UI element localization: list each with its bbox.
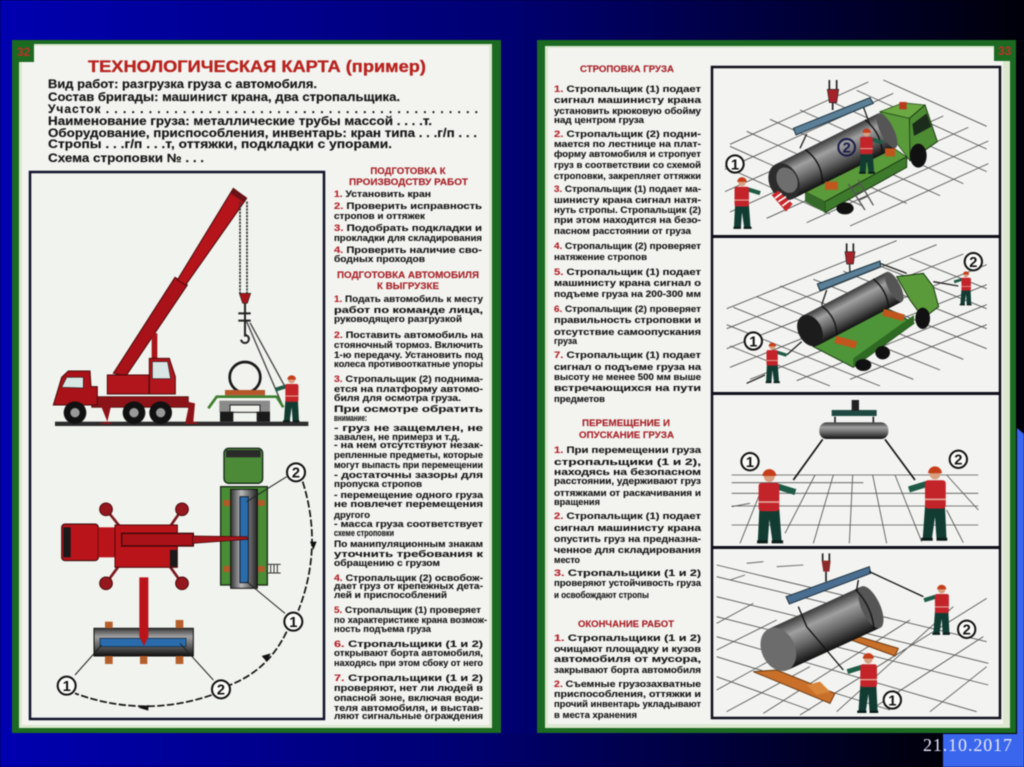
list: preparation steps: стропов и оттяжек [334,211,425,221]
list: slinging steps: сигнал о подъеме груза на [554,362,702,372]
list: truck preparation steps: ность подъема груза [334,624,432,634]
list: slinging steps: при этом находится на безо- [554,215,701,225]
list: truck preparation steps: репленные предметы, которые [334,450,483,460]
list: truck preparation steps: руководящего разгрузкой [334,314,462,324]
list: moving steps: и освобождают стропы [554,590,649,600]
list: slinging steps: 6. Стропальщик (2) проверяет [554,304,701,314]
illustration 4: lowering pipe onto supports [717,553,988,715]
list: truck preparation steps: другого [334,510,370,520]
list: preparation steps: 1. Установить кран [334,189,431,199]
list: truck preparation steps: колеса противооткатные упоры [334,359,483,369]
list: end of work steps: 2. Съемные грузозахватные [554,679,701,689]
list: truck preparation steps: 7. Стропальщики (1 и 2) [334,673,483,683]
list: truck preparation steps: пропуска стропов [334,479,422,489]
text block: work description [48,77,478,165]
list: truck preparation steps: схеме строповки [334,528,394,538]
illustration 4: lowering pipe onto supports: 1 [888,693,896,709]
list: truck preparation steps: 5. Стропальщик (1) проверяет [334,605,481,615]
list: end of work steps: закрывают борта автомобиля [554,665,701,675]
list: truck preparation steps: - перемещение одного груза [334,490,484,500]
list: truck preparation steps: уточнить требования к [334,549,483,559]
list: truck preparation steps: дает груз от крепежных дета- [334,581,483,591]
list: truck preparation steps: обращению с грузом [334,558,440,568]
list: slinging steps: груз в соответствии со схемой [554,160,701,170]
heading: truck preparation [337,270,479,292]
illustration 4: lowering pipe onto supports: 2 [963,623,971,639]
panel: crane diagrams frame [30,172,324,719]
list: end of work steps: прочий инвентарь укладывают [554,699,701,709]
list: moving steps: сигнал машинисту крана [554,523,702,533]
list: slinging steps: 3. Стропальщик (1) подает ма- [554,184,701,194]
illustration: crane and truck, plan view: 2 [217,683,225,699]
list: truck preparation steps: находясь при этом сбоку от него [334,658,483,668]
list: moving steps: 3. Стропальщики (1 и 2) [554,568,701,578]
list: truck preparation steps: 4. Стропальщик (2) освобож- [334,573,483,583]
list: slinging steps: встречающихся на пути [554,383,701,393]
list: moving steps: стропальщики (1 и 2), [554,457,701,467]
divider [712,235,1000,238]
illustration: crane and truck, plan view [58,448,317,711]
list: truck preparation steps: биля для осмотра груза. [334,393,461,403]
text block: work description: Оборудование, приспособления, инвентарь: кран типа . . .г/п . . . [48,126,477,140]
list: end of work steps: автомобиля от мусора, [554,654,701,664]
list: truck preparation steps: проверяют, нет ли людей в [334,683,483,693]
title: ТЕХНОЛОГИЧЕСКАЯ КАРТА (пример) [88,57,426,76]
list: moving steps: 1. При перемещении груза [554,445,702,455]
list: moving steps: ченное для складирования [554,545,701,555]
page number 33: 33 [998,44,1012,58]
illustration: crane and truck, plan view: 2 [292,466,300,482]
text column: slinging [554,64,702,720]
list: slinging steps: шинисту крана сигнал натя- [554,195,701,205]
text block: work description: Вид работ: разгрузка груза с автомобиля. [48,77,317,91]
text block: work description: Стропы . . .г/п . . .т, оттяжки, подкладки с упорами. [48,137,392,151]
list: end of work steps [554,633,701,720]
illustration 3: guiding lifted pipe [732,400,978,543]
list: truck preparation steps: могут выпасть при перемещении [334,460,483,470]
list: slinging steps: предметов [554,394,605,404]
text block: work description: Схема строповки № . . . [48,151,204,165]
date: 21.10.2017 [923,735,1012,755]
heading: truck preparation: ПОДГОТОВКА АВТОМОБИЛЯ [337,270,479,281]
list: moving steps: 2. Стропальщик (1) подает [554,511,702,521]
list: truck preparation steps [334,294,487,721]
list: moving steps: находясь на безопасном [554,467,701,477]
page number 32 [13,41,34,62]
illustration 1: slinging pipe on truck: 1 [731,157,739,173]
illustration: crane lifting pipe from truck, side view [53,188,308,426]
list: moving steps: опустить груз на предназна- [554,534,701,544]
page number 33 [994,41,1016,61]
list: truck preparation steps: открывают борта автомобиля, [334,648,483,658]
list: slinging steps: форму автомобиля и стропует [554,149,701,159]
list: moving steps [554,445,702,600]
list: truck preparation steps: 6. Стропальщики (1 и 2) [334,639,483,649]
list: moving steps: вращения [554,497,600,507]
list: truck preparation steps: стояночный тормоз. Включить [334,340,483,350]
list: slinging steps: нуть стропы. Стропальщик (2) [554,205,701,215]
list: preparation steps: бодных проходов [334,254,425,264]
divider [712,392,1000,395]
list: truck preparation steps: 1. Подать автомобиль к месту [334,294,484,304]
heading: truck preparation: К ВЫГРУЗКЕ [377,281,440,292]
list: moving steps: оттяжками от раскачивания и [554,488,701,498]
text block: work description: Наименование груза: металлические трубы массой . . . .т. [48,114,432,128]
list: truck preparation steps: лей и приспособлений [334,590,447,600]
illustration 2: tensioning slings: 2 [969,255,977,271]
list: truck preparation steps: ется на платформу автомо- [334,384,483,394]
text block: work description: Состав бригады: машинист крана, два стропальщика. [48,90,400,104]
list: slinging steps: натяжение стропов [554,252,647,262]
list: slinging steps: строповки, закрепляет оттяжки [554,171,701,181]
heading: preparation for work [349,166,468,188]
panel: right poster [537,40,1016,733]
list: preparation steps: 4. Проверить наличие сво- [334,245,482,255]
list: slinging steps: над центром груза [554,115,645,125]
illustration 1: slinging pipe on truck: 2 [843,141,851,157]
list: slinging steps: груза [554,336,578,346]
list: truck preparation steps: - достаточны зазоры для [334,470,483,480]
illustration: crane and truck, plan view: 1 [289,615,297,631]
list: truck preparation steps: работ по команде лица, [334,305,483,315]
list: end of work steps: 1. Стропальщики (1 и 2) [554,633,701,643]
list: slinging steps: пасном расстоянии от груза [554,226,692,236]
list: slinging steps: 5. Стропальщик (1) подает [554,267,702,277]
heading: moving and lowering [579,418,674,441]
illustration 2: tensioning slings [727,241,987,386]
illustration 3: guiding lifted pipe: 2 [954,453,962,469]
list: truck preparation steps: - груз не защемлен, не [334,423,483,433]
heading: end of work: ОКОНЧАНИЕ РАБОТ [578,619,674,630]
list: truck preparation steps: опасной зоне, включая води- [334,693,483,703]
list: preparation steps: 3. Подобрать подкладки и [334,223,482,233]
illustration: crane and truck, plan view: 1 [63,679,71,695]
list: slinging steps: установить крюковую обойму [554,106,702,116]
list: slinging steps: подъеме груза на 200-300 мм [554,289,701,299]
heading: preparation for work: ПОДГОТОВКА К [370,166,446,177]
list: truck preparation steps: При осмотре обратить [334,404,483,414]
list: truck preparation steps: ляют сигнальные ограждения [334,711,483,721]
list: slinging steps: отсутствие самоопускания [554,327,701,337]
panel: left poster [12,40,501,733]
list: slinging steps: 2. Стропальщик (2) подни- [554,129,701,139]
list: truck preparation steps: внимание: [334,413,367,423]
heading: moving and lowering: ПЕРЕМЕЩЕНИЕ И [582,418,670,429]
divider [712,546,1000,549]
list: truck preparation steps: По манипуляционным знакам [334,539,483,549]
list: end of work steps: приспособления, оттяжки и [554,689,701,699]
list: slinging steps: 4. Стропальщик (2) проверяет [554,241,701,251]
list: end of work steps: в места хранения [554,710,637,720]
list: slinging steps: мается по лестнице на плат- [554,139,701,149]
list: truck preparation steps: 1-ю передачу. Установить под [334,350,483,360]
list: preparation steps [334,189,482,264]
list: truck preparation steps: завален, не примерз и т.д. [334,432,460,442]
list: slinging steps: сигнал машинисту крана [554,95,702,105]
list: truck preparation steps: - на нем отсутствуют незак- [334,440,483,450]
heading: preparation for work: ПРОИЗВОДСТВУ РАБОТ [349,177,468,188]
list: slinging steps: 7. Стропальщик (1) подает [554,350,702,360]
list: moving steps: проверяют устойчивость груза [554,578,702,588]
list: truck preparation steps: 2. Поставить автомобиль на [334,330,484,340]
page number 32: 32 [17,45,31,59]
list: moving steps: расстоянии, удерживают груз [554,476,701,486]
list: slinging steps: высоту не менее 500 мм выше [554,372,701,382]
illustration 2: tensioning slings: 1 [749,334,757,350]
list: slinging steps: машинисту крана сигнал о [554,278,701,288]
list: slinging steps: правильность строповки и [554,315,701,325]
heading: moving and lowering: ОПУСКАНИЕ ГРУЗА [579,430,674,441]
list: slinging steps: 1. Стропальщик (1) подает [554,84,702,94]
list: preparation steps: 2. Проверить исправность [334,201,482,211]
list: truck preparation steps: 3. Стропальщик (2) поднима- [334,374,483,384]
list: end of work steps: очищают площадку и кузов [554,644,701,654]
list: truck preparation steps: по характеристике крана возмож- [334,615,487,625]
text block: work description: Участок . . . . . . . . . . . . . . . . . . . . . . . . . . . . . . . . . . . . . . . . . . . . [48,102,478,116]
heading: slinging: СТРОПОВКА ГРУЗА [580,64,674,75]
list: truck preparation steps: - масса груза соответствует [334,519,484,529]
illustration 3: guiding lifted pipe: 1 [746,455,754,471]
list: truck preparation steps: теля автомобиля, и выстав- [334,703,483,713]
panel: illustrations frame [712,67,1000,718]
illustration 1: slinging pipe on truck [725,80,988,229]
list: preparation steps: прокладки для складирования [334,233,482,243]
list: slinging steps [554,84,702,404]
list: moving steps: место [554,555,580,565]
list: truck preparation steps: не повлечет перемещения [334,499,483,509]
text column: preparation [334,166,487,721]
